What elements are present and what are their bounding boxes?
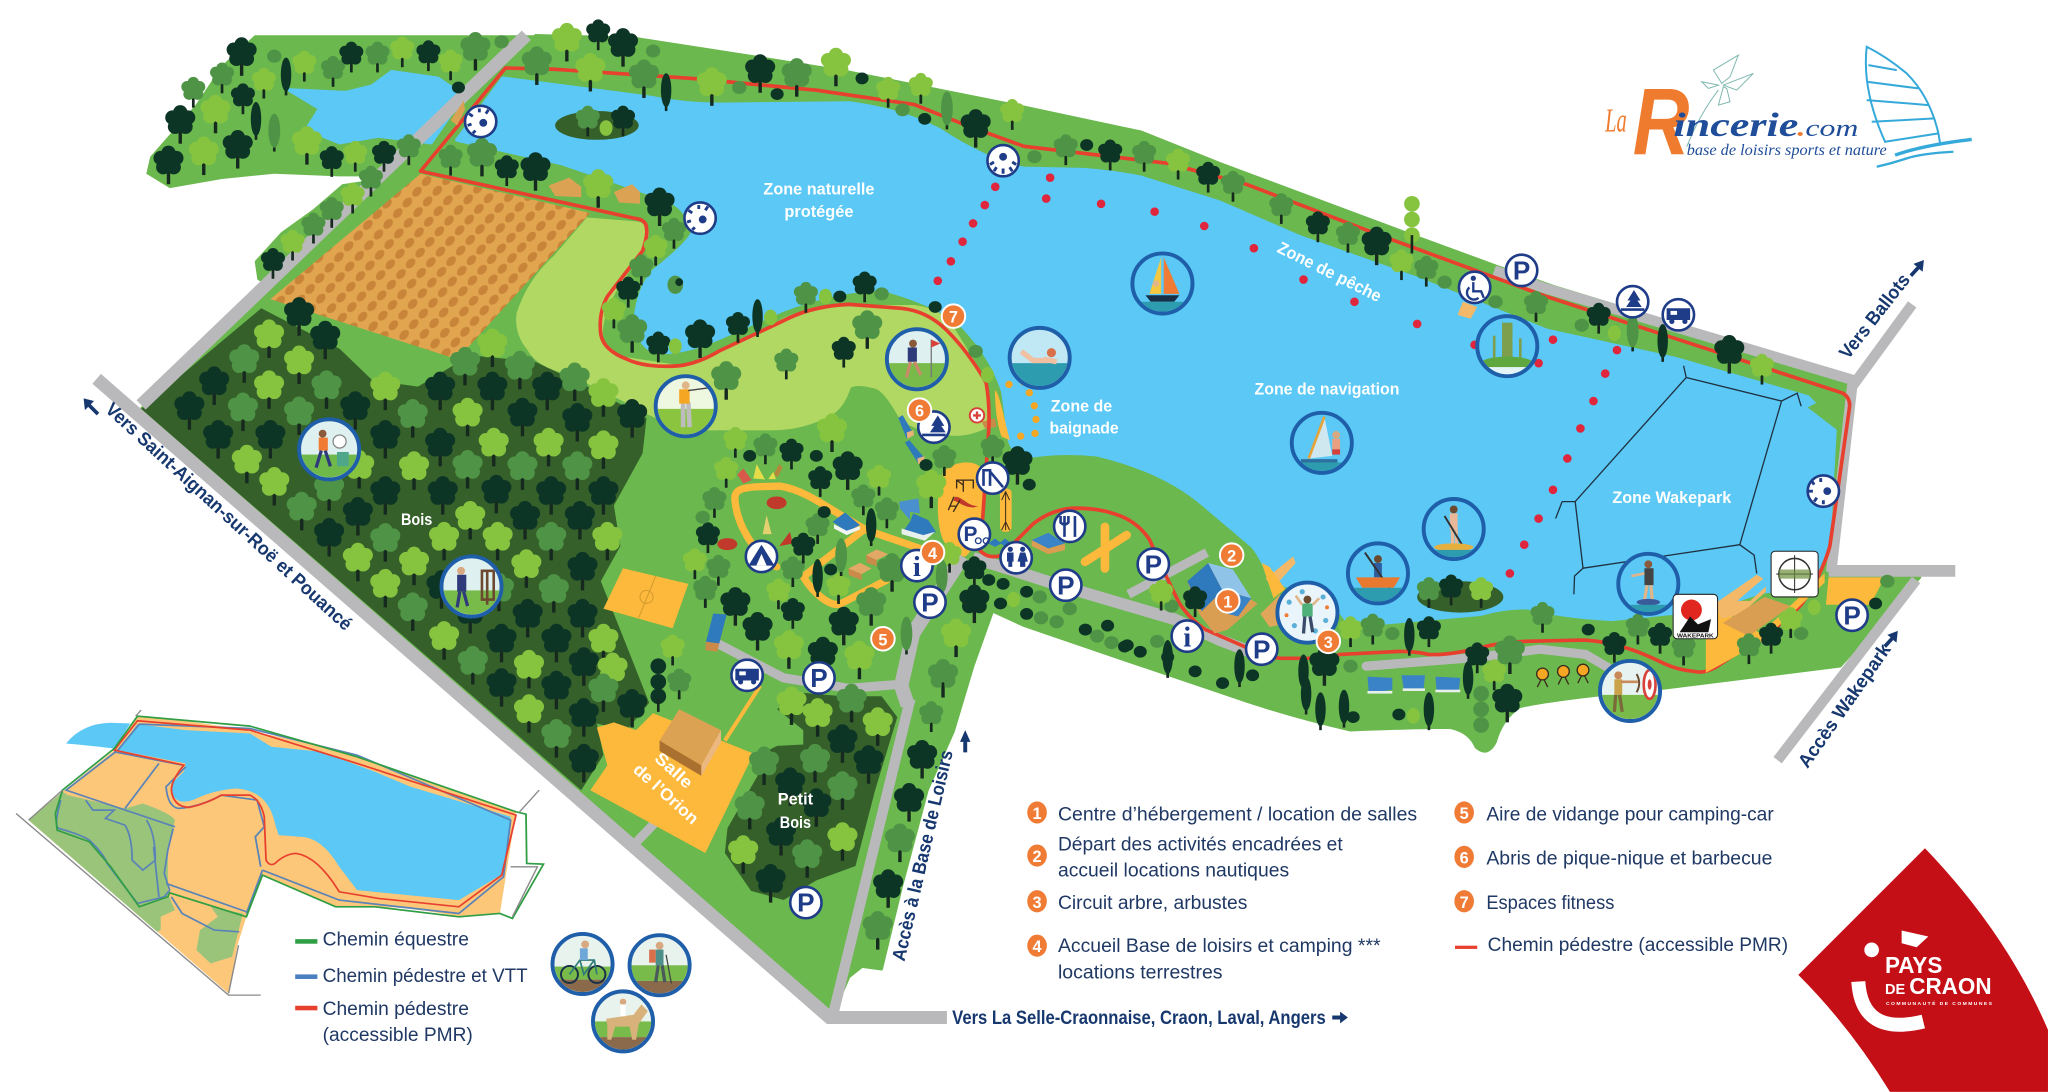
logo sail bbox=[1866, 47, 1972, 167]
trees: west lobe and strip bbox=[153, 32, 509, 279]
mini map lake bbox=[118, 724, 511, 900]
activity: horse riding bbox=[593, 991, 653, 1051]
trees: Petit Bois bbox=[728, 684, 893, 903]
icon: parking markers: P bbox=[1843, 600, 1861, 630]
legend item 7 bbox=[1454, 890, 1614, 914]
road label: Vers Saint-Aignan: Vers Saint-Aignan-sur-Roë et Pouancé bbox=[101, 399, 356, 635]
icon: information points: i bbox=[1183, 622, 1191, 654]
legend item 2: Départ des activités encadrées et bbox=[1058, 834, 1343, 855]
trees: Bois forest bbox=[174, 297, 647, 782]
small beach shelters bbox=[988, 538, 1012, 547]
map base: park land bbox=[141, 35, 1920, 1016]
number badges on map: 3 bbox=[1324, 634, 1333, 652]
mini map pond bbox=[66, 723, 130, 748]
activity: archery bbox=[1600, 661, 1660, 721]
logo: Pays de Craon bbox=[1798, 848, 2048, 1092]
path to Salle de l'Orion bbox=[725, 686, 760, 741]
slide bbox=[948, 497, 978, 512]
labels: water zones: Zone naturelle bbox=[763, 180, 874, 199]
tents bbox=[717, 464, 793, 550]
swing bbox=[957, 480, 973, 492]
legend item 2 bbox=[1027, 834, 1343, 881]
mini map red trail bbox=[114, 721, 516, 907]
icon: playground bbox=[977, 462, 1008, 494]
activity: disc golf bbox=[441, 556, 502, 617]
legend: accessible path: (accessible PMR) bbox=[323, 1025, 473, 1046]
road label: Vers La Selle-Craonnaise: Vers La Selle-Craonnaise, Craon, Laval, Angers bbox=[952, 1008, 1326, 1029]
number badges on map bbox=[871, 304, 1340, 653]
road label: Accès Wakepark: Accès Wakepark bbox=[1794, 640, 1896, 772]
legend item 4: 4 bbox=[1033, 938, 1042, 956]
number badges on map: 6 bbox=[915, 403, 924, 421]
wakepark logo tile bbox=[1673, 594, 1718, 639]
legend item 7: 7 bbox=[1460, 894, 1469, 912]
mini map road outlines bbox=[16, 710, 539, 995]
labels: water zones: Zone de pêche bbox=[1274, 238, 1385, 306]
pontoon near first aid bbox=[982, 418, 997, 428]
legend item 1: 1 bbox=[1033, 805, 1042, 823]
legend: equestrian path: Chemin équestre bbox=[323, 930, 469, 951]
labels: land zones: de l’Orion bbox=[629, 760, 702, 828]
crop field bbox=[270, 174, 590, 359]
trees: inner shore and golf bbox=[439, 138, 994, 400]
activity: swimming bbox=[1010, 328, 1070, 389]
icon: sunburst markers bbox=[465, 106, 1839, 507]
islets bbox=[555, 106, 1503, 613]
logo: Pays de Craon: COMMUNAUTÉ DE COMMUNES bbox=[1886, 999, 1993, 1007]
activity: wetland reeds bbox=[1477, 316, 1537, 376]
logo: La Rincerie: .com bbox=[1797, 116, 1858, 142]
labels: water zones bbox=[763, 180, 1732, 507]
X-shaped yellow path bbox=[1085, 527, 1127, 568]
playground area bbox=[938, 462, 984, 557]
legend item 6: Abris de pique-nique et barbecue bbox=[1486, 849, 1772, 870]
logo: Pays de Craon: DE CRAON bbox=[1885, 973, 1992, 999]
number badges on map: 4 bbox=[928, 545, 937, 563]
sports field bbox=[603, 568, 688, 628]
logo: Pays de Craon: PAYS bbox=[1885, 952, 1942, 978]
legend: numbered services bbox=[1027, 801, 1788, 983]
trees: centre bbox=[650, 413, 1179, 712]
camper pitch bbox=[705, 613, 727, 652]
activity: golf bbox=[656, 376, 716, 438]
labels: water zones: Zone Wakepark bbox=[1612, 488, 1732, 507]
legend item 4 bbox=[1027, 935, 1381, 983]
legend item 1: Centre d’hébergement / location de salles bbox=[1058, 804, 1417, 825]
huts and pontoons bbox=[451, 101, 1885, 673]
labels: water zones: Zone de bbox=[1051, 396, 1112, 415]
activity: hiking bbox=[630, 935, 690, 995]
green peninsula at lake corner bbox=[1808, 400, 1843, 432]
inset mini map bbox=[16, 710, 543, 995]
icon: parking markers: P bbox=[1057, 570, 1075, 600]
labels: land zones: Bois bbox=[780, 813, 811, 832]
yellow areas: Salle de l'Orion esplanade bbox=[590, 713, 754, 853]
logo: La Rincerie: base de loisirs sports et nature bbox=[1687, 142, 1887, 159]
zone: Petit Bois forest bbox=[725, 692, 897, 900]
wakepark logo tile: WAKEPARK bbox=[1677, 633, 1714, 639]
beach bbox=[995, 390, 1010, 440]
wake school logo tile bbox=[1771, 551, 1818, 597]
mini map green trails bbox=[55, 716, 543, 918]
icon: camper service bbox=[731, 660, 763, 691]
trees: access strip bbox=[863, 661, 955, 950]
camping yellow paths bbox=[735, 486, 920, 604]
labels: land zones bbox=[401, 510, 813, 832]
icon: information points bbox=[901, 550, 1203, 654]
icon: parking markers: P bbox=[921, 587, 939, 617]
icon: parking markers: P bbox=[797, 888, 815, 918]
icon: parking markers: P bbox=[810, 663, 828, 693]
icon: restaurant bbox=[1054, 511, 1085, 542]
logo butterfly bbox=[1687, 55, 1753, 147]
legend item 3: Circuit arbre, arbustes bbox=[1058, 893, 1247, 914]
centre detail: camping, playground, buildings bbox=[705, 378, 1127, 652]
legend: accessible path bbox=[295, 999, 473, 1046]
legend item 6: 6 bbox=[1460, 849, 1469, 867]
activity: windsurf bbox=[1292, 413, 1352, 473]
legend item 7: Espaces fitness bbox=[1486, 893, 1614, 914]
bathing zone buoys bbox=[1005, 378, 1040, 440]
icon: information points: i bbox=[913, 551, 921, 583]
icon: toilets bbox=[1000, 542, 1032, 573]
blue building bbox=[899, 498, 936, 541]
camping shelters south bbox=[1368, 675, 1460, 694]
icon: parking markers: P bbox=[963, 523, 977, 546]
camping lodge bbox=[833, 512, 860, 535]
labels: land zones: Salle bbox=[651, 749, 697, 792]
legend: pedestrian and MTB path: Chemin pédestre et VTT bbox=[323, 966, 528, 987]
logo: La Rincerie bbox=[1604, 47, 1972, 175]
activity: kayak bbox=[1348, 543, 1408, 603]
icon: camping tent bbox=[746, 541, 777, 572]
labels: water zones: baignade bbox=[1049, 419, 1119, 438]
icon: accessibility bbox=[1459, 272, 1490, 303]
number badges on map: 2 bbox=[1227, 548, 1236, 566]
building: centre d'hébergement bbox=[1187, 563, 1258, 634]
icon: first aid bbox=[970, 408, 984, 423]
activity: cycling bbox=[552, 934, 613, 994]
zone: Bois dark forest bbox=[141, 308, 649, 790]
building: Salle de l'Orion bbox=[660, 709, 721, 776]
legend item 3: 3 bbox=[1033, 894, 1042, 912]
wakepark cable lines bbox=[1556, 366, 1801, 594]
mini map land bbox=[29, 716, 516, 993]
legend item 2: 2 bbox=[1033, 848, 1042, 866]
legend: accessible path: Chemin pédestre bbox=[323, 999, 469, 1020]
logo: La Rincerie: R bbox=[1633, 69, 1689, 175]
labels: land zones: Bois bbox=[401, 510, 432, 529]
activity: climbing wall bbox=[1277, 583, 1337, 643]
activity: foot golf bbox=[887, 329, 947, 389]
zone: golf meadow bbox=[518, 219, 989, 434]
icon: picnic area bbox=[918, 411, 950, 443]
navigation buoys bbox=[933, 173, 1621, 578]
logo: La Rincerie: incerie bbox=[1673, 107, 1799, 144]
icon: picnic and forest bbox=[1617, 286, 1648, 317]
icon: camper van bbox=[1663, 299, 1694, 330]
archery targets bbox=[1537, 664, 1589, 687]
legend pedestrian path: Chemin pédestre (accessible PMR) bbox=[1488, 935, 1788, 956]
inset legend bbox=[295, 930, 528, 1046]
icon: parking markers: P bbox=[1145, 549, 1162, 579]
pond bbox=[290, 72, 457, 142]
restaurant building bbox=[1032, 533, 1065, 554]
mini map blue trails bbox=[57, 724, 511, 932]
road label: Accès à la Base de Loisirs: Accès à la Base de Loisirs bbox=[889, 748, 958, 963]
fitness strip with arrow bbox=[1000, 488, 1012, 532]
picnic shelters bbox=[898, 415, 925, 464]
labels: water zones: Zone de navigation bbox=[1255, 379, 1400, 398]
road label: Vers Ballots: Vers Ballots bbox=[1836, 270, 1915, 363]
labels: land zones: Petit bbox=[778, 790, 813, 809]
legend item 4: locations terrestres bbox=[1058, 962, 1223, 983]
activity: orienteering runner bbox=[299, 419, 359, 481]
number badges on map: 7 bbox=[949, 309, 958, 327]
red pedestrian path bbox=[421, 68, 1850, 672]
mini map green areas bbox=[29, 792, 243, 963]
activity: paddle board bbox=[1424, 499, 1484, 559]
icon: parking markers bbox=[790, 255, 1868, 918]
icon: parking markers: P bbox=[1513, 256, 1530, 286]
logo wordmark: La bbox=[1604, 103, 1627, 140]
legend item 5: Aire de vidange pour camping-car bbox=[1486, 804, 1774, 825]
legend item 5: 5 bbox=[1460, 805, 1469, 823]
legend item 4: Accueil Base de loisirs et camping *** bbox=[1058, 936, 1381, 957]
icon: parking markers: P bbox=[1253, 634, 1270, 664]
number badges on map: 5 bbox=[878, 631, 887, 649]
lake bbox=[457, 78, 1835, 626]
number badges on map: 1 bbox=[1223, 593, 1232, 611]
activity: sailing bbox=[1132, 253, 1192, 314]
legend item 2: accueil locations nautiques bbox=[1058, 860, 1289, 881]
activity: wakeboard bbox=[1618, 554, 1678, 614]
trees: north bank bbox=[522, 19, 1774, 385]
trees: south bank bbox=[1079, 574, 1895, 733]
gîtes bbox=[848, 549, 888, 580]
labels: water zones: protégée bbox=[784, 202, 854, 221]
